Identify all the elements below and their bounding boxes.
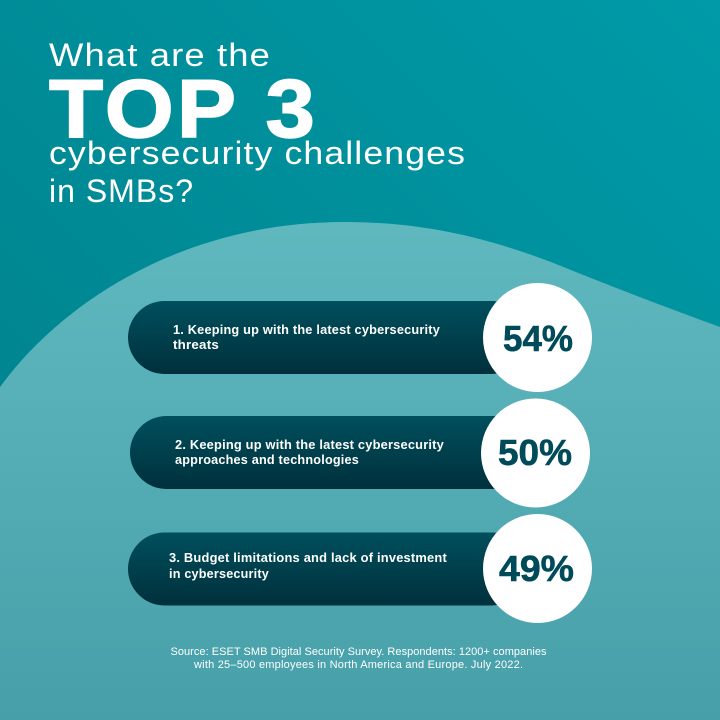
title: in SMBs? (49, 173, 194, 209)
value 3: 49% (499, 548, 574, 589)
label 1: threats (173, 338, 219, 352)
circle 3 (483, 514, 592, 623)
challenge 1 (128, 283, 592, 392)
bar 3 (128, 532, 528, 606)
source note: with 25–500 employees in North America and Europe. July 2022. (193, 659, 523, 671)
circle 1 (483, 283, 592, 392)
bar 2 (130, 416, 530, 489)
label 3: in cybersecurity (169, 567, 269, 581)
title (49, 37, 466, 209)
title: TOP 3 (49, 62, 318, 155)
source note: Source: ESET SMB Digital Security Survey. Respondents: 1200+ companies (170, 646, 547, 658)
bar 1 (128, 301, 528, 374)
wave panel (0, 222, 720, 720)
title: cybersecurity challenges (49, 135, 466, 171)
label 3: 3. Budget limitations and lack of investment (169, 551, 448, 565)
label 1: 1. Keeping up with the latest cybersecurity (173, 323, 440, 337)
label 2: 2. Keeping up with the latest cybersecurity (175, 438, 444, 452)
value 2: 50% (498, 432, 572, 473)
title: What are the (49, 37, 271, 73)
value 1: 54% (503, 318, 573, 359)
label 2: approaches and technologies (175, 453, 359, 467)
circle 2 (481, 398, 590, 508)
challenge 3 (128, 514, 592, 623)
challenge 2 (130, 398, 590, 508)
